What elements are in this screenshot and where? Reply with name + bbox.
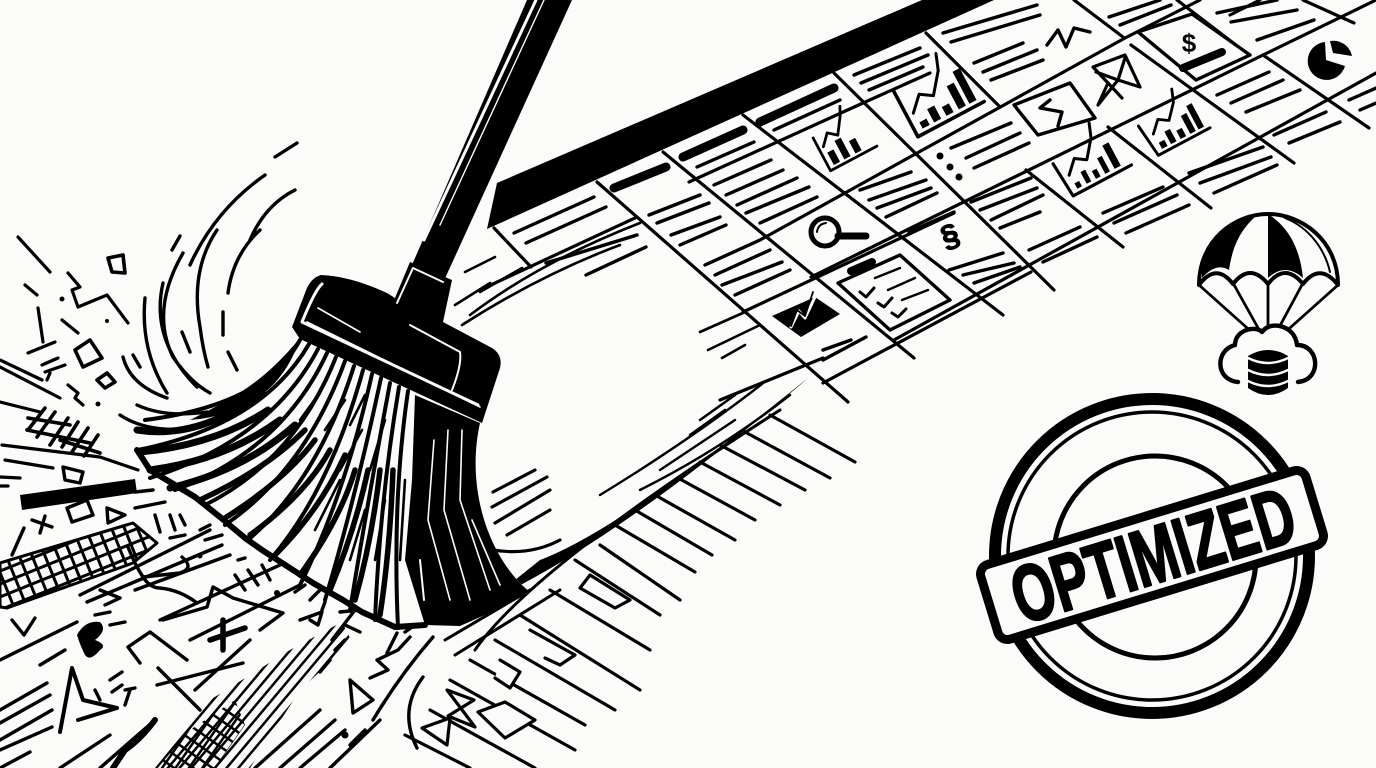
icon: small bar chart bbox=[806, 100, 877, 171]
icon: bar chart lower bbox=[1044, 114, 1131, 197]
stamp: optimized bbox=[978, 399, 1326, 713]
debris: crosshatch patch bbox=[155, 700, 245, 768]
cloud bbox=[1220, 326, 1315, 382]
data table grid lines bbox=[480, 0, 1376, 402]
outer ring bbox=[995, 399, 1309, 713]
icon: section sign: § bbox=[936, 216, 964, 255]
debris: crosshatched net band bbox=[0, 523, 157, 608]
lower fading table bbox=[405, 415, 855, 768]
debris: lower lines and arrow bbox=[0, 618, 250, 768]
debris: black blob bbox=[77, 622, 103, 658]
debris: hashed grid bbox=[27, 408, 100, 456]
swoosh trails left of broom bbox=[120, 143, 297, 429]
broom head bbox=[292, 262, 501, 423]
parachute with cloud database icon bbox=[1199, 214, 1338, 395]
icon: pulse line bbox=[1047, 28, 1090, 47]
icon: bar chart right bbox=[1130, 82, 1210, 157]
icon: dollar tag: $ bbox=[1182, 28, 1197, 58]
canopy bbox=[1199, 214, 1338, 285]
icon: square with zigzag bbox=[1014, 83, 1095, 135]
database cylinder bbox=[1248, 350, 1288, 395]
debris: black bar and shapes bbox=[12, 467, 210, 555]
icon: solid line chart bbox=[772, 290, 840, 337]
inner ring bbox=[1054, 456, 1256, 658]
debris: right marks bbox=[255, 590, 560, 768]
debris: squiggles and lines middle bbox=[80, 530, 360, 640]
swoosh trails right of broom bbox=[455, 223, 808, 650]
debris: dense hatch band bbox=[155, 622, 352, 768]
table text rows bbox=[514, 0, 1376, 360]
icon: magnifier bbox=[811, 218, 866, 246]
icon: clipboard checklist bbox=[838, 255, 950, 330]
icon: pie chart bbox=[1308, 41, 1352, 80]
debris: scattered shapes upper bbox=[0, 237, 138, 486]
broom handle bbox=[412, 0, 572, 285]
broom bristles bbox=[137, 338, 530, 628]
icon: arrow envelope shape bbox=[1093, 55, 1140, 105]
icon: large bar chart bbox=[887, 44, 984, 137]
debris: x mark bbox=[210, 620, 245, 650]
icon: dollar tag bbox=[1138, 14, 1250, 80]
banner bbox=[978, 468, 1326, 642]
strings bbox=[1199, 283, 1338, 335]
table header bar bbox=[487, 0, 994, 229]
